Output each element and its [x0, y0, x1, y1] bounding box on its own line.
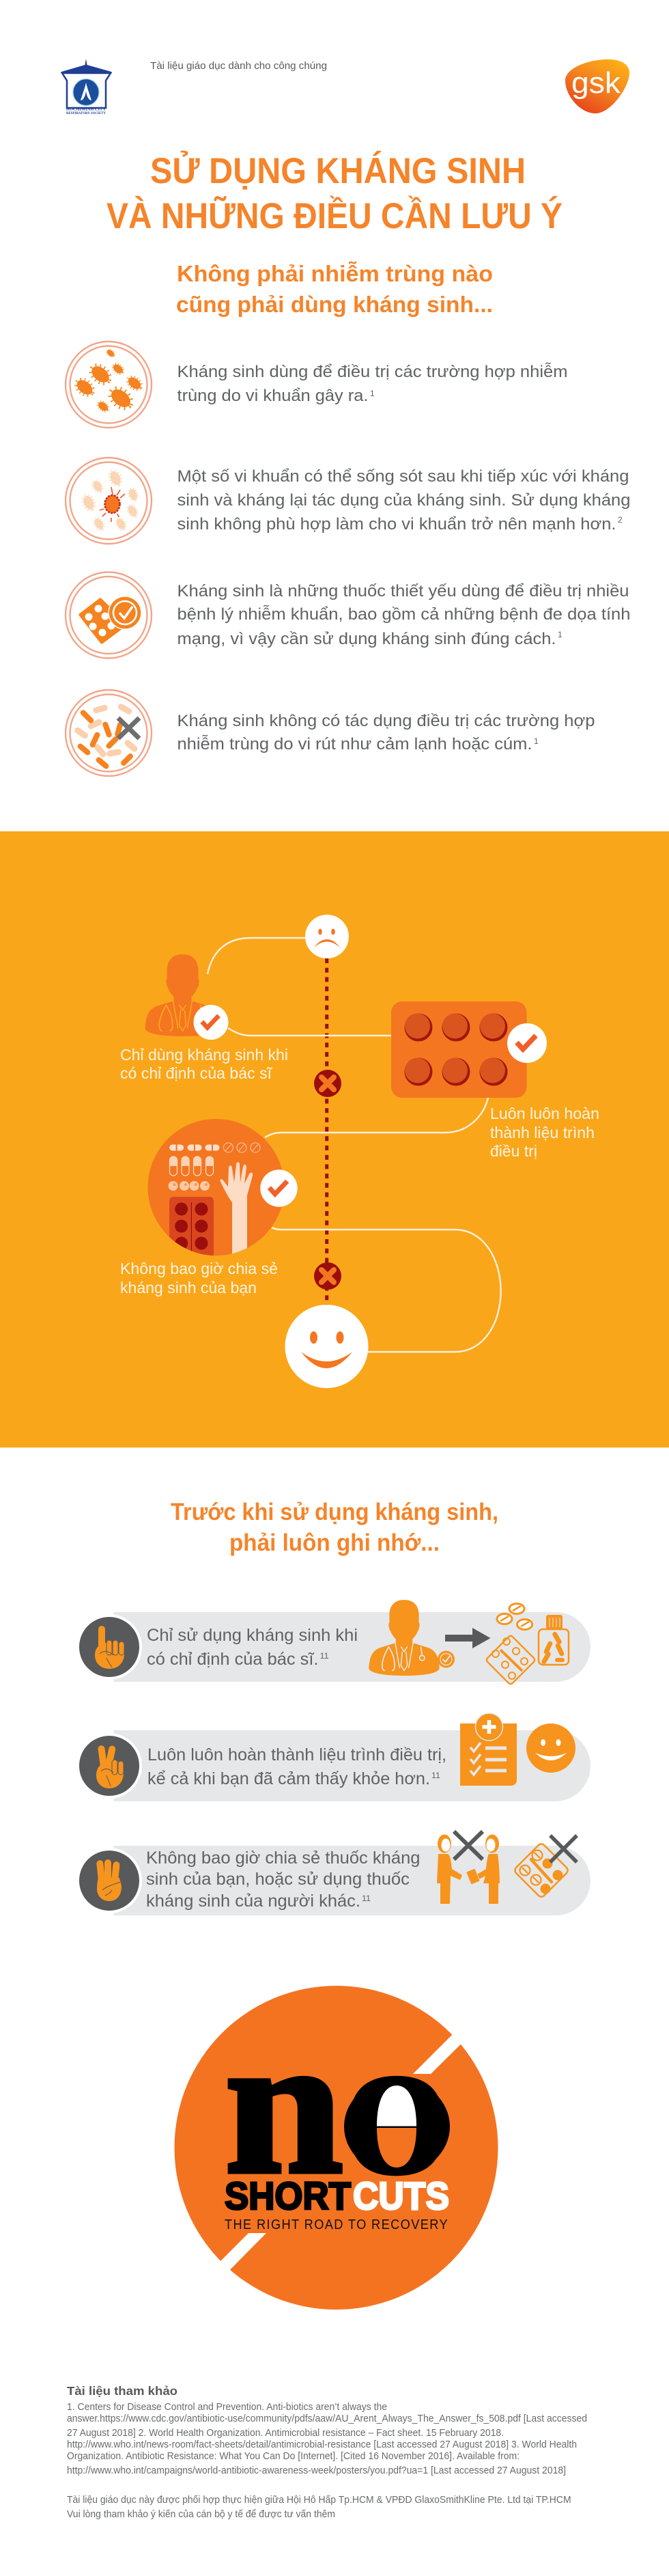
text block [147, 1745, 446, 1788]
references list: http://www.who.int/campaigns/world-antibiotic-awareness-week/posters/you.pdf?ua=1 [Last accessed 27 August 2018] [67, 2465, 566, 2476]
references heading: Tài liệu tham khảo [67, 2384, 177, 2398]
panel: fact 2 [66, 458, 631, 544]
text block [177, 363, 568, 405]
text block: trùng do vi khuẩn gây ra. [177, 387, 369, 405]
references list [67, 2402, 587, 2476]
text block: Không bao giờ chia sẻ thuốc kháng [146, 1848, 421, 1868]
title: SỬ DỤNG KHÁNG SINH [150, 150, 526, 191]
text block: Chỉ sử dụng kháng sinh khi [147, 1626, 358, 1645]
text block [177, 582, 631, 648]
references list: Organization. Antibiotic Resistance: What You Can Do [Internet]. [Cited 16 November 2016]. Available from: [67, 2451, 519, 2462]
icon: two fingers [76, 1733, 142, 1799]
icon: happy face [526, 1723, 575, 1773]
text block: sinh và kháng lại tác dụng của kháng sinh. Sử dụng kháng [177, 491, 631, 510]
subtitle: cũng phải dùng kháng sinh... [176, 292, 493, 317]
text block: 1 [534, 736, 539, 746]
references list: answer.https://www.cdc.gov/antibiotic-use/community/pdfs/aaw/AU_Arent_Always_The_Answer_fs_508.pdf [Last accessed [67, 2413, 587, 2424]
icon: treatment checklist [460, 1713, 517, 1786]
logo: GSK: gsk [571, 66, 621, 100]
label: doctor [120, 1046, 288, 1082]
label: complete course: thành liệu trình [490, 1124, 595, 1141]
icon: happy face [285, 1305, 369, 1388]
icon: two people sharing medicine [437, 1831, 500, 1904]
disclaimer: Vui lòng tham khảo ý kiến của cán bộ y tế để được tư vấn thêm [67, 2509, 335, 2520]
icon: petri dish with pill pack and check [66, 572, 152, 659]
icon: cross 1 [314, 1070, 341, 1097]
label: never share [120, 1260, 278, 1297]
logo: Ho Chi Minh City Respiratory Society: HOCHIMINH CITY [66, 108, 106, 112]
subtitle: Không phải nhiễm trùng nào [177, 261, 493, 286]
text block: sinh của bạn, hoặc sử dụng thuốc [146, 1870, 410, 1889]
connector lines [208, 938, 501, 1352]
references list: 27 August 2018] 2. World Health Organization. Antimicrobial resistance – Fact sheet. 15 February 2018. [67, 2428, 504, 2439]
text block: Kháng sinh dùng để điều trị các trường hợp nhiễm [177, 363, 568, 381]
dotted path to recovery [325, 958, 328, 1306]
text block: Kháng sinh không có tác dụng điều trị các trường hợp [177, 712, 595, 730]
text block [146, 1848, 421, 1911]
text block: kể cả khi bạn đã cảm thấy khỏe hơn. [147, 1769, 430, 1788]
title [106, 150, 563, 236]
arrow [445, 1628, 490, 1648]
logo: Ho Chi Minh City Respiratory Society: RESPIRATORY SOCIETY [66, 112, 106, 115]
text block [177, 712, 595, 753]
panel: fact 4 [66, 690, 595, 776]
icon: crossed pill pack [513, 1836, 577, 1898]
disclaimer: Tài liệu giáo dục này được phối hợp thực hiện giữa Hội Hô Hấp Tp.HCM & VPĐD GlaxoSmithKline Pte. Ltd tại TP.HCM [67, 2495, 571, 2506]
subtitle [176, 261, 493, 317]
text block: nhiễm trùng do vi rút như cảm lạnh hoặc cúm. [177, 735, 532, 753]
wordmark: shortcuts: SHORT [225, 2174, 351, 2218]
label: never share: Không bao giờ chia sẻ [120, 1260, 278, 1277]
text block: 2 [618, 515, 623, 525]
text block: bệnh lý nhiễm khuẩn, bao gồm cả những bệnh đe dọa tính [177, 605, 631, 624]
panel: orange recovery path [0, 831, 669, 1448]
icon: blister pack with check [391, 1001, 547, 1098]
text block: 1 [558, 630, 563, 639]
text block: 1 [370, 389, 375, 398]
tagline: THE RIGHT ROAD TO RECOVERY [225, 2217, 449, 2232]
logo: no shortcuts [175, 1986, 498, 2310]
heading: remember: Trước khi sử dụng kháng sinh, [171, 1499, 498, 1525]
panel: fact 1 [66, 342, 568, 428]
wordmark: shortcuts [225, 2174, 449, 2218]
references list: http://www.who.int/news-room/fact-sheets/detail/antimicrobial-resistance [Last accessed 27 August 2018] 3. World Health [67, 2439, 577, 2450]
heading: remember [171, 1499, 498, 1556]
icon: one finger [76, 1614, 142, 1680]
label: doctor: có chỉ định của bác sĩ [120, 1064, 273, 1082]
text block: mạng, vì vậy cần sử dụng kháng sinh đúng cách. [177, 630, 556, 648]
logo: GSK [565, 59, 629, 113]
label: doctor: Chỉ dùng kháng sinh khi [120, 1046, 288, 1064]
text block: kháng sinh của người khác. [146, 1892, 360, 1911]
text block: 11 [362, 1894, 371, 1903]
label: never share: kháng sinh của bạn [120, 1279, 257, 1297]
text block [147, 1626, 358, 1669]
icon: three fingers [76, 1848, 142, 1913]
heading: remember: phải luôn ghi nhớ... [229, 1529, 440, 1556]
icon: sad face [305, 915, 349, 958]
text block: Một số vi khuẩn có thể sống sót sau khi tiếp xúc với kháng [177, 467, 629, 486]
panel: reminder 3 [76, 1831, 590, 1915]
audience note: Tài liệu giáo dục dành cho công chúng [150, 61, 327, 72]
icon: petri dish with resistant bacterium [66, 458, 152, 544]
label: complete course [490, 1105, 599, 1160]
icon: medicines [485, 1604, 569, 1685]
text block: Luôn luôn hoàn thành liệu trình điều trị, [147, 1745, 446, 1764]
disclaimer [67, 2495, 571, 2520]
references [67, 2384, 587, 2520]
text block: Kháng sinh là những thuốc thiết yếu dùng để điều trị nhiều [177, 582, 629, 600]
icon: doctor with check [145, 954, 229, 1040]
text block: có chỉ định của bác sĩ. [147, 1650, 318, 1669]
icon: circle of shared medicines and hand [147, 1119, 298, 1258]
text block: 11 [320, 1651, 329, 1661]
text block: sinh không phù hợp làm cho vi khuẩn trở nên mạnh hơn. [177, 515, 616, 534]
wordmark: shortcuts: CUTS [353, 2174, 449, 2218]
title: VÀ NHỮNG ĐIỀU CẦN LƯU Ý [106, 195, 563, 236]
icon: doctor [369, 1600, 455, 1676]
references list: 1. Centers for Disease Control and Prevention. Anti-biotics aren’t always the [67, 2402, 387, 2413]
panel: reminder 2 [76, 1713, 590, 1801]
icon: petri dish with bacteria [66, 342, 152, 428]
label: complete course: điều trị [490, 1142, 537, 1160]
label: complete course: Luôn luôn hoàn [490, 1105, 599, 1122]
diagonal strip [205, 2014, 481, 2286]
icon: cross 2 [314, 1262, 341, 1290]
wordmark: no: no [225, 1995, 450, 2215]
icon: petri dish with viruses and cross [66, 690, 152, 776]
panel: reminder 1 [76, 1600, 590, 1685]
text block: 11 [431, 1771, 440, 1780]
panel: fact 3 [66, 572, 631, 659]
text block [177, 467, 631, 534]
logo: Ho Chi Minh City Respiratory Society [61, 59, 112, 115]
